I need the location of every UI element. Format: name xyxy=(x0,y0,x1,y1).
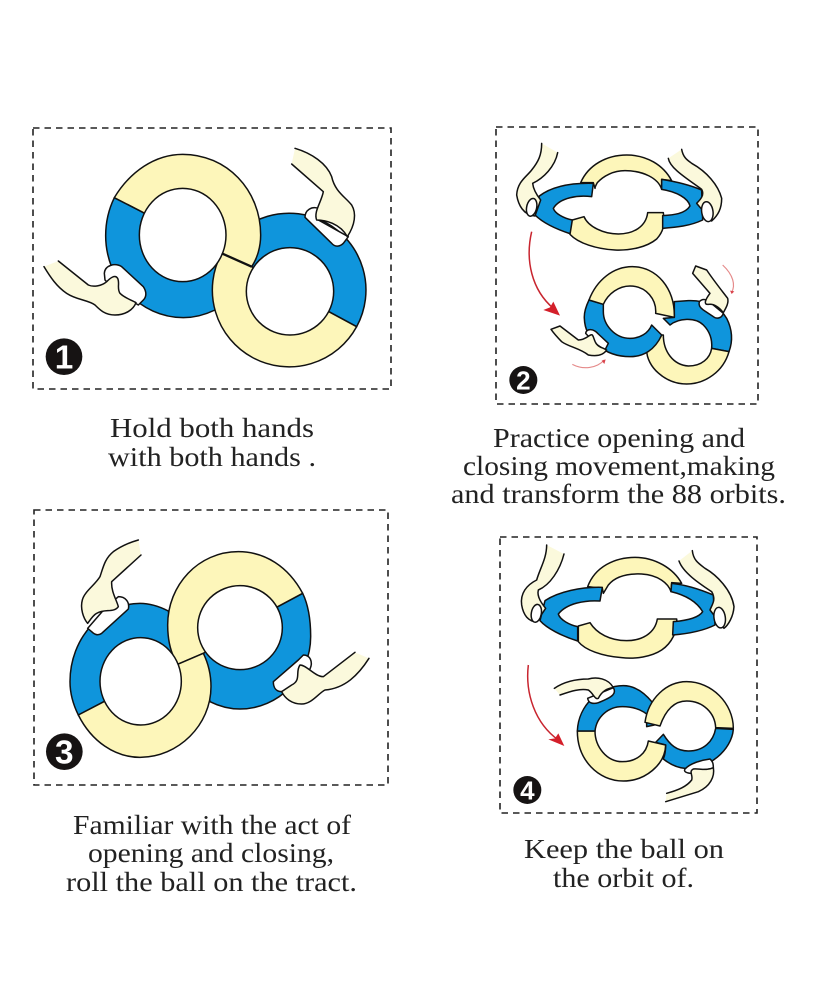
panel 2: opening and closing xyxy=(496,127,758,404)
step number 4 xyxy=(513,775,541,805)
arrow: faint motion lower xyxy=(572,359,606,368)
step number 2: 2 xyxy=(516,365,531,395)
panel 4: keep the ball on the orbit xyxy=(500,537,757,813)
arrow: red down arrow xyxy=(528,665,564,746)
caption 4: the orbit of. xyxy=(553,863,694,893)
caption 3: Familiar with the act of xyxy=(73,810,351,840)
step number 3 xyxy=(46,733,83,772)
icon: top right hand xyxy=(679,551,734,629)
step number 2 xyxy=(509,365,537,395)
step number 4: 4 xyxy=(520,775,535,805)
icon: upper left hand xyxy=(82,540,141,635)
icon: lower left hand xyxy=(551,326,608,356)
caption 1: with both hands . xyxy=(108,442,316,472)
caption 2: and transform the 88 orbits. xyxy=(451,479,786,509)
caption 1: Hold both hands xyxy=(110,413,314,443)
icon: upper hand xyxy=(554,678,615,703)
panel 1: hold the ring xyxy=(33,128,391,389)
step number 1 xyxy=(46,338,82,377)
icon: upper right hand xyxy=(292,148,355,246)
icon: top left hand xyxy=(517,143,558,217)
caption 1 xyxy=(108,413,316,472)
caption 2 xyxy=(451,423,786,509)
caption 2: closing movement,making xyxy=(463,451,775,481)
caption 4: Keep the ball on xyxy=(524,834,725,864)
closed ring xyxy=(584,267,731,384)
arrow: red down arrow xyxy=(529,232,560,316)
caption 3: opening and closing, xyxy=(88,838,334,868)
step number 1: 1 xyxy=(55,340,73,377)
caption 3 xyxy=(66,810,357,897)
panel 3: roll the ball xyxy=(34,510,388,785)
open ring xyxy=(535,155,703,250)
caption 2: Practice opening and xyxy=(493,423,746,453)
caption 4 xyxy=(524,834,725,893)
rings: figure eight xyxy=(70,552,311,757)
icon: lower hand xyxy=(666,759,714,802)
closed ring xyxy=(577,682,733,781)
icon: top right hand xyxy=(668,149,722,222)
step number 3: 3 xyxy=(55,735,74,772)
arrow: faint motion upper xyxy=(723,265,734,294)
icon: lower right hand xyxy=(273,652,369,704)
open ring xyxy=(540,557,715,658)
icon: lower left hand xyxy=(44,261,146,315)
icon: upper right hand xyxy=(693,266,728,318)
icon: top left hand xyxy=(521,545,564,623)
caption 3: roll the ball on the tract. xyxy=(66,867,357,897)
rings: figure eight xyxy=(106,154,366,367)
